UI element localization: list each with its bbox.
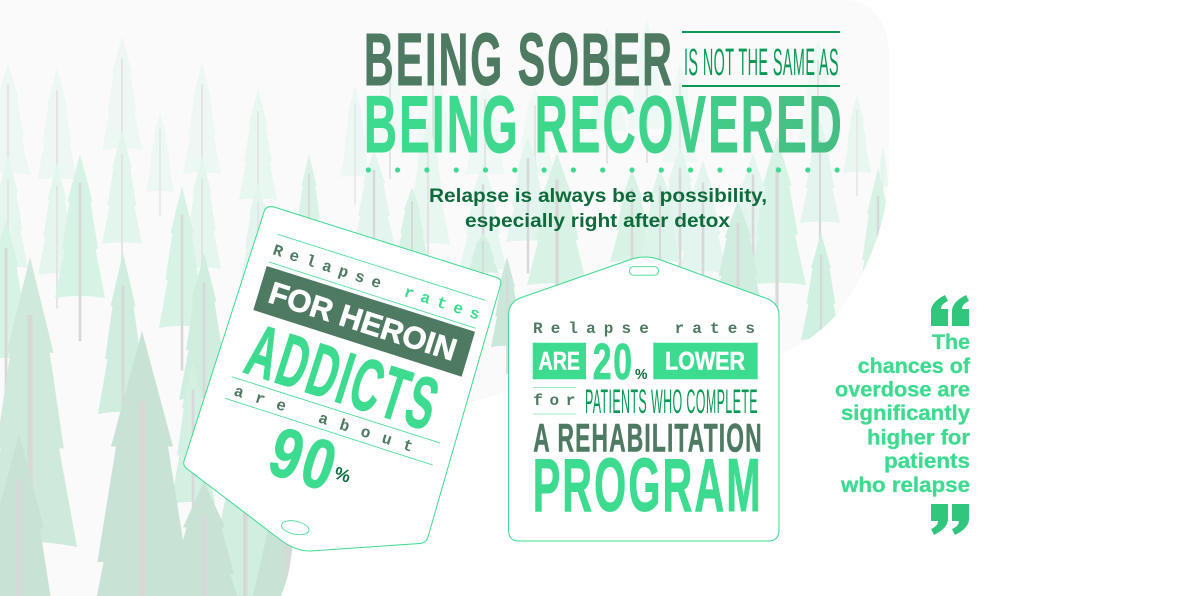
title line: being sober: BEING SOBER <box>364 18 674 101</box>
tag: lower: LOWER <box>665 348 745 376</box>
stat: 90 percent: 90 <box>260 412 348 507</box>
stat: 90 percent: % <box>332 463 353 487</box>
banner: for heroin: FOR HEROIN <box>265 275 461 368</box>
text: addicts: ADDICTS <box>237 308 450 447</box>
badge slot <box>630 267 658 275</box>
text: relapse rates: Relapse rates <box>270 242 482 324</box>
text: program: PROGRAM <box>533 443 763 527</box>
stat: 20 percent: % <box>635 366 648 383</box>
quote text: patients <box>884 450 970 473</box>
phone button <box>280 518 310 537</box>
callout: overdose quote <box>835 295 971 535</box>
text: for: for <box>533 392 575 410</box>
icon: closing quote <box>931 504 969 535</box>
tag: are <box>533 343 586 379</box>
quote text: chances of <box>858 355 971 378</box>
quote text <box>835 331 971 497</box>
subtitle: Relapse is always be a possibility, <box>429 185 767 207</box>
badge outline <box>508 257 779 541</box>
tag: lower <box>653 343 758 379</box>
panel: phone card heroin relapse <box>184 207 501 551</box>
title <box>364 18 844 170</box>
tag: are: ARE <box>538 348 580 376</box>
forest of pine trees <box>0 20 900 596</box>
text: are about: are about <box>231 383 415 457</box>
title line: being recovered: BEING RECOVERED <box>364 80 844 170</box>
text: a rehabilitation: A REHABILITATION <box>533 417 763 461</box>
phone outline <box>184 207 501 551</box>
subtitle: especially right after detox <box>465 210 730 232</box>
icon: opening quote <box>931 295 969 326</box>
text: for <box>533 387 576 415</box>
text: IS NOT THE SAME AS <box>684 42 839 84</box>
panel: id badge rehabilitation relapse <box>508 257 779 541</box>
dotted divider <box>366 167 840 173</box>
background blob <box>0 0 889 596</box>
rule lines <box>225 234 485 465</box>
quote text: overdose are <box>835 378 970 402</box>
quote text: The <box>932 331 970 354</box>
text: relapse rates: Relapse rates <box>533 320 755 338</box>
subtitle <box>429 185 767 232</box>
quote text: who relapse <box>840 474 970 497</box>
stat: 20 percent: 20 <box>593 333 634 390</box>
text: PATIENTS WHO COMPLETE <box>585 383 758 421</box>
quote text: higher for <box>867 426 970 450</box>
quote text: significantly <box>841 402 970 425</box>
